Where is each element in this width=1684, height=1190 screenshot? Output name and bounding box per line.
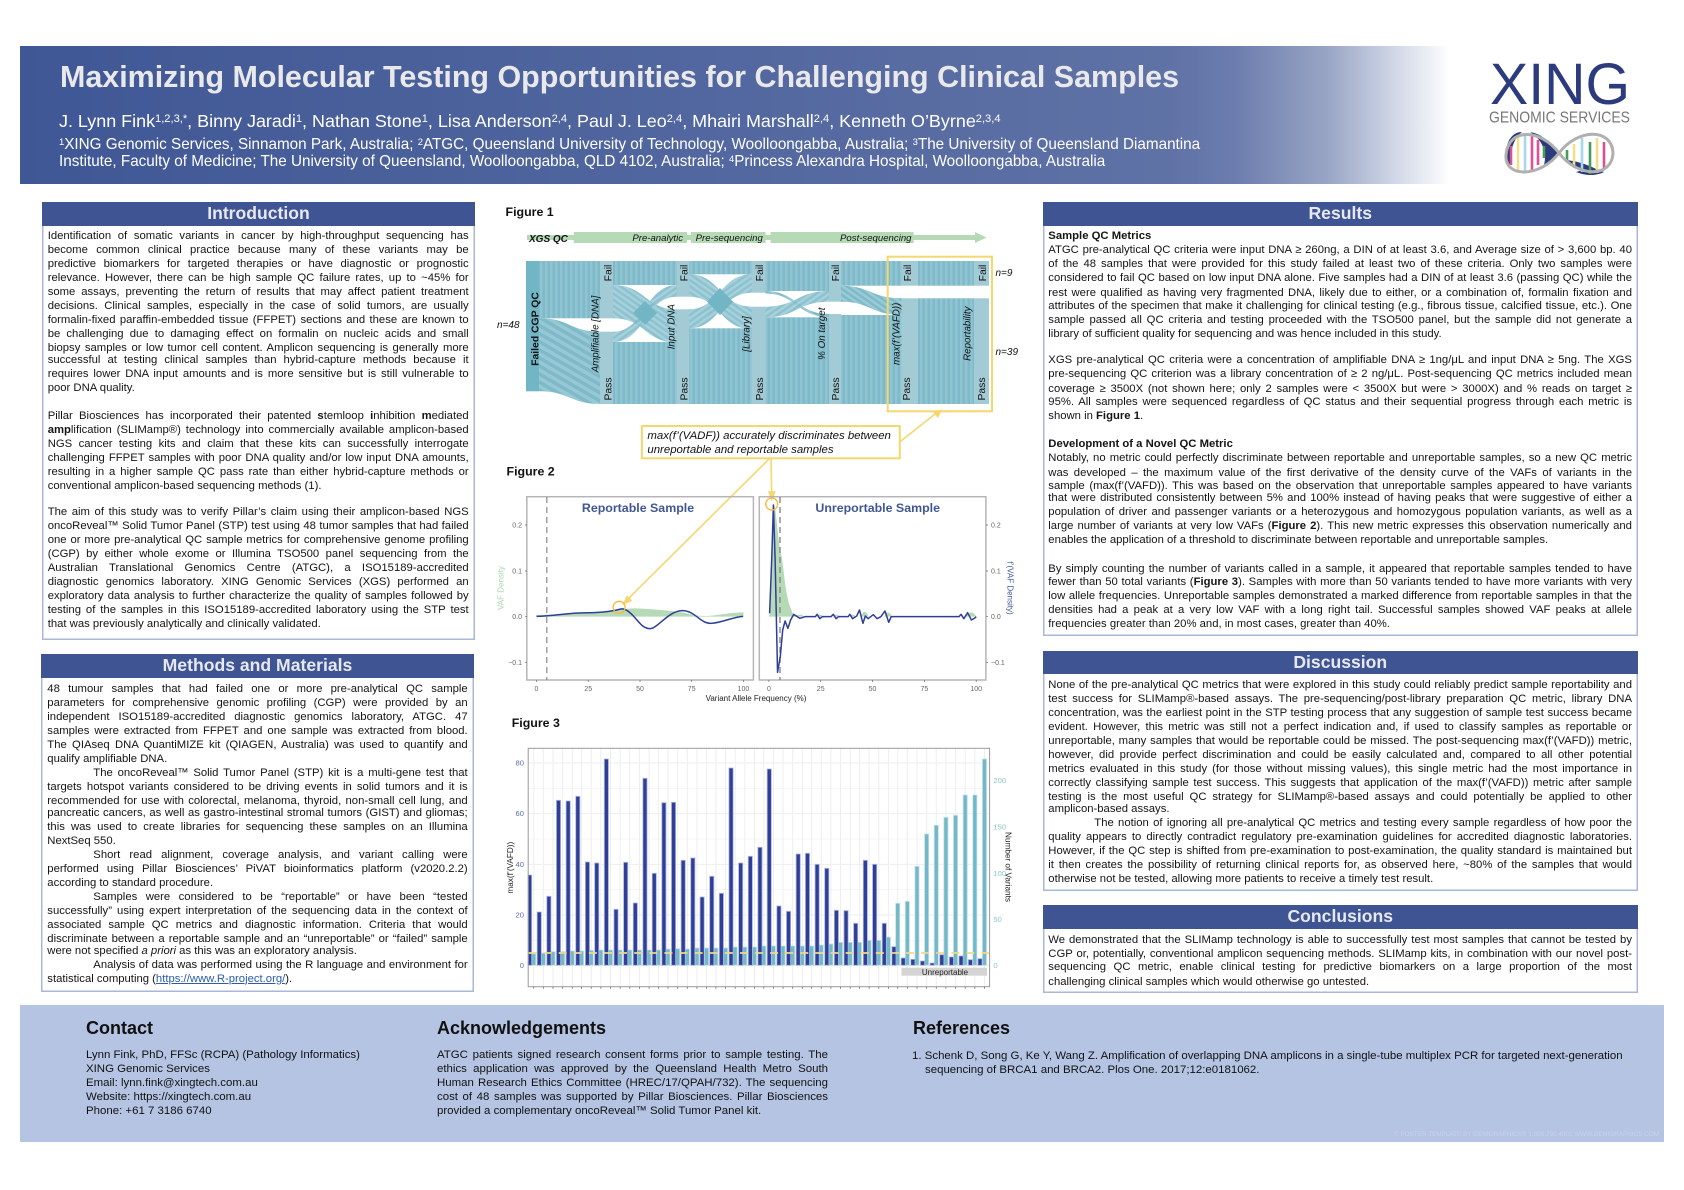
blue bars: max(f'(VAFD)) <box>528 759 982 965</box>
text: contact details <box>86 1048 360 1117</box>
text: discussion body: The notion of ignoring all pre-analytical QC metrics and testing every sample regardless of how poor the <box>1094 817 1632 829</box>
text: discussion body: None of the pre-analytical QC metrics that were explored in this study could reliably predict sample reportability and <box>1048 679 1632 691</box>
text: results body: enables the application of a threshold to discriminate between reportable and unreportable samples. <box>1048 534 1548 546</box>
text: methods body: statistical computing (https://www.R-project.org/). <box>47 973 292 985</box>
text: methods body: Samples were considered to be “reportable” or have been “tested <box>93 891 468 903</box>
logo: XING Genomic Services <box>1489 52 1630 175</box>
sankey node and metric labels: Input DNA <box>666 304 677 349</box>
text: discussion body: however, did provide perfect discrimination and could be easily calculated and, compared to all other potential <box>1048 749 1632 761</box>
sankey node and metric labels: Pass <box>680 377 690 401</box>
sankey node and metric labels: Failed CGP QC <box>530 292 541 366</box>
left axis labels: 0 <box>520 961 524 970</box>
axes and tick labels <box>508 522 1005 693</box>
heading: discussion: Discussion <box>1293 652 1387 672</box>
text: introduction body: Identification of somatic variants in cancer by high-throughput sequencing has <box>48 230 469 242</box>
axes and tick labels: 0.2 <box>512 522 522 530</box>
axis titles: Variant Allele Frequency (%) <box>706 694 807 703</box>
text: methods body: recommended for use with colorectal, melanoma, thyroid, non-small cell lung, and <box>47 795 468 807</box>
text: references list: 1. Schenk D, Song G, Ke Y, Wang Z. Amplification of overlapping DNA amplicons in a single-tube multiplex PCR for targeted next-generation <box>912 1050 1623 1062</box>
text: results body: sample (max(f’(VAFD)). This was based on the observation that unreportable samples appeared to have variants <box>1048 480 1632 492</box>
left axis labels <box>516 758 524 970</box>
logo: XING Genomic Services: XING <box>1490 52 1630 117</box>
text: introduction body: diagnostic genomics laboratory. XING Genomic Services (XGS) performed an <box>48 576 469 588</box>
text: results body: considered to fail QC based on low input DNA alone. Five samples had a DIN of at least 3.6 (passing QC) while the <box>1048 272 1632 284</box>
text: methods body: targets hotspot variants considered to be driving events in solid tumors and it is <box>47 781 468 793</box>
axes and tick labels: 25 <box>817 686 825 693</box>
right axis labels: 100 <box>993 869 1006 878</box>
text: introduction body: requires lower DNA input amounts and is more sensitive but is still vulnerable to <box>48 368 469 380</box>
text: discussion body: it then creates the possibility of returning clinical reports for, as observed here, ~80% of the samples that would <box>1048 859 1632 871</box>
text: conclusions body <box>1048 934 1632 988</box>
heading: results: Results <box>1308 203 1372 223</box>
text: results body: coverage ≥ 3500X (not shown here; only 2 samples were < 3500X but were > 3000X) and % reads on target ≥ <box>1048 383 1632 395</box>
axis titles: VAF Density <box>496 566 506 610</box>
chart: reportable sample <box>527 497 753 680</box>
axes and tick labels: 100 <box>738 686 749 693</box>
sankey node and metric labels: max(f’(VAFD)) <box>892 303 902 365</box>
chart frame <box>528 748 990 987</box>
text: references list <box>912 1050 1623 1076</box>
chart: unreportable sample <box>759 497 986 680</box>
figure 3 label: Figure 3 <box>512 716 560 730</box>
text: introduction body <box>48 230 469 630</box>
text: introduction body: one or more pre-analytical QC sample metrics for comprehensive genome profiling <box>48 534 469 546</box>
text: results body: 95%. All samples were sequenced regardless of QC status and their sequential progress through each metric is <box>1048 396 1632 408</box>
right axis labels: 150 <box>993 822 1006 832</box>
heading: results <box>1043 202 1638 226</box>
text: results body: large number of variants at very low VAFs (Figure 2). This new metric expresses this observation numerically and <box>1048 520 1632 532</box>
text: methods body: The oncoReveal™ Solid Tumor Panel (STP) kit is a multi-gene test that <box>93 767 468 779</box>
threshold dashed line <box>528 952 989 954</box>
text: introduction body: conventional amplicon-based sequencing methods (1). <box>48 480 322 492</box>
text: results body: rest were qualified as having very fragmented DNA, likely due to either, or a combination of, formalin fixation and <box>1048 287 1632 299</box>
text: conclusions body: challenging clinical samples which would otherwise go untested. <box>1048 976 1369 988</box>
text: discussion body: correctly classifying sample test success. This suggests that application of the max(f’(VAFD)) metric after sample <box>1048 777 1632 789</box>
text: methods body: this was used to create libraries for sequencing these samples on an Illumina <box>47 821 468 833</box>
heading: introduction <box>42 202 475 226</box>
heading: methods and materials <box>41 654 474 678</box>
text: results body: By simply counting the number of variants called in a sample, it appeared that reportable samples tended to have <box>1048 563 1632 575</box>
footer panel: contact, acknowledgements, references <box>20 1005 1664 1142</box>
right axis labels: 200 <box>993 776 1006 785</box>
text: discussion body: test success for SLIMamp®-based assays. The pre-sequencing/post-library preparation QC metric, library DNA <box>1048 693 1632 705</box>
text: results body: frequencies greater than 20% and, in most cases, greater than 40%. <box>1048 618 1390 630</box>
text: acknowledgements body <box>437 1048 828 1117</box>
text: methods body: The QIAseq DNA QuantiMIZE kit (QIAGEN, Australia) was used to quantify and <box>47 739 468 751</box>
text: methods body: performed using Pillar Biosciences’ PiVAT bioinformatics platform (v2020.2.2) <box>47 863 468 875</box>
heading: conclusions <box>1043 905 1638 929</box>
axis titles: max(f’(VAFD)) <box>506 842 515 894</box>
text: contact details: Website: https://xingtech.com.au <box>86 1091 251 1103</box>
sankey node and metric labels: Pass <box>902 377 913 401</box>
text: introduction body: predictive biomarkers for targeted therapies or have diagnostic or prognostic <box>48 258 469 270</box>
text: acknowledgements body: provided a complementary oncoReveal™ Solid Tumor Panel kit. <box>437 1105 761 1117</box>
text: introduction body: Pillar Biosciences has incorporated their patented stemloop inhibition mediated <box>48 410 469 422</box>
sankey node and metric labels: Pass <box>604 377 614 401</box>
callout connectors <box>624 410 941 604</box>
heading: references: References <box>913 1018 1010 1038</box>
axis titles: Number of Variants <box>1004 832 1012 902</box>
figure 1: QC stage arrow <box>527 232 987 245</box>
sankey node and metric labels: Fail <box>604 265 614 281</box>
text: results body: XGS pre-analytical QC criteria were a concentration of amplifiable DNA ≥ 1ng/μL and input DNA ≥ 5ng. The XGS <box>1048 354 1632 366</box>
sankey node and metric labels: Pass <box>977 377 988 401</box>
text: introduction body: that was previously analytically and clinically validated. <box>48 618 321 630</box>
axes and tick labels: 0 <box>767 686 771 693</box>
sankey node and metric labels: Fail <box>680 265 690 281</box>
text: methods body: discriminate between a reportable sample and an “unreportable” or “failed” sample <box>47 933 468 945</box>
axes and tick labels: 100 <box>970 686 982 693</box>
chart: reportable sample: Reportable Sample <box>582 501 694 515</box>
panel: discussion <box>1043 651 1638 891</box>
affiliations: Institute, Faculty of Medicine; The University of Queensland, Woolloongabba, QLD 4102, Australia; 4Princess Alexandra Hospital, Woolloongabba, Australia <box>59 153 1105 170</box>
text: discussion body: quality appears to directly contradict regulatory pre-examination guidelines for accredited diagnostic laboratories. <box>1048 831 1632 843</box>
sankey node and metric labels: n=9 <box>996 268 1013 279</box>
text: methods body: associated sample QC metrics and diagnostic information. Criteria that would <box>47 919 468 931</box>
text: introduction body: The aim of this study was to verify Pillar’s claim using their amplicon-based NGS <box>48 506 469 518</box>
axes and tick labels: 0.0 <box>512 614 522 621</box>
chart: unreportable sample: Unreportable Sample <box>815 501 940 515</box>
text: discussion body: However, if the QC step is shifted from pre-examination to post-examination, the quality standard is maintained but <box>1048 845 1632 857</box>
authors: J. Lynn Fink1,2,3,*, Binny Jaradi1, Nathan Stone1, Lisa Anderson2,4, Paul J. Leo2,4, Mhairi Marshall2,4, Kenneth O’Byrne2,3,4 <box>59 111 1001 131</box>
text: contact details: Email: lynn.fink@xingtech.com.au <box>86 1077 258 1089</box>
text: conclusions body: sequencing QC metric, enable clinical testing for predictive biomarkers on a large proportion of the most <box>1048 961 1632 973</box>
text: introduction body: resulting in a higher sample QC pass rate than either hybrid-capture methods or <box>48 466 469 478</box>
text: methods body: qualify amplifiable DNA. <box>47 753 167 765</box>
left axis labels: 80 <box>516 758 524 768</box>
text: references list: sequencing of BRCA1 and BRCA2. Plos One. 2017;12:e0181062. <box>925 1064 1259 1076</box>
axis titles <box>506 832 1012 902</box>
sankey node and metric labels: Reportability <box>962 305 974 361</box>
left axis labels: 40 <box>516 860 524 869</box>
text: introduction body: be challenging due to damaging effect on formalin on nucleic acids and small <box>48 328 469 340</box>
text: introduction body: oncoReveal™ Solid Tumor Panel (STP) test using 48 tumor samples that had failed <box>48 520 469 532</box>
unreportable strip: Unreportable <box>922 968 969 977</box>
text: results body: pre-sequencing QC criterion was a library concentration of ≥ 2 ng/μL. Post-sequencing QC metrics included mean <box>1048 368 1632 380</box>
right axis labels <box>993 776 1006 970</box>
text: introduction body: challenging FFPET samples with poor DNA quality and/or low input DNA amounts, <box>48 452 469 464</box>
text: results body: was developed – the maximum value of the first derivative of the density curve of the VAFs of variants in the <box>1048 467 1632 479</box>
text: introduction body: poor DNA quality. <box>48 382 135 394</box>
ticks <box>534 987 984 989</box>
panel: introduction <box>42 202 475 640</box>
logo: XING Genomic Services: GENOMIC SERVICES <box>1489 110 1630 126</box>
text: discussion body: concentration, was the earliest point in the STP testing process that any suggestion of sample test success became <box>1048 707 1632 719</box>
title: Maximizing Molecular Testing Opportunities for Challenging Clinical Samples <box>60 60 1179 94</box>
callout: unreportable and reportable samples <box>647 444 834 456</box>
text: discussion body <box>1048 679 1632 885</box>
watermark: © POSTER TEMPLATE BY GENIGRAPHICS® 1.800.790.4001 WWW.GENIGRAPHICS.COM <box>1394 1131 1659 1138</box>
unreportable strip <box>902 968 987 977</box>
axes and tick labels: 50 <box>636 686 644 693</box>
text: methods body: successfully” using expert interpretation of the sequencing data in the context of <box>47 905 468 917</box>
axis titles: f’(VAF Density) <box>1006 561 1014 615</box>
header banner <box>20 46 1664 184</box>
text: introduction body: amplification (SLIMamp®) technology into commercially available amplicon-based <box>48 424 469 436</box>
text: methods body: pancreatic cancers, as well as gastro-intestinal stromal tumors (GIST) and gliomas; <box>47 807 468 819</box>
sankey nodes <box>526 261 989 404</box>
text: results body: attributes of the specimen that make it challenging for clinical testing (e.g., fibrous tissue, calcified tissue, etc.). One <box>1048 300 1632 312</box>
text: conclusions body: CGP or, potentially, conventional amplicon sequencing methods. SLIMamp kits, in combination with our novel post- <box>1048 948 1632 960</box>
sankey node and metric labels: Pass <box>755 377 766 401</box>
text: results body: sample passed all QC criteria and testing proceeded with the TSO500 panel, but the sample did not generate a <box>1048 314 1632 326</box>
text: results body: library of sufficient quality for sequencing and was hence included in this study. <box>1048 328 1442 340</box>
axes and tick labels: 50 <box>869 686 876 693</box>
text: acknowledgements body: cost of 48 samples was supported by Pillar Biosciences. Pillar Biosciences <box>437 1091 828 1103</box>
text: results body: Notably, no metric could perfectly discriminate between reportable and unreportable samples, so a new QC metric <box>1048 452 1632 464</box>
sankey node and metric labels: n=39 <box>996 347 1018 358</box>
sankey node and metric labels: Amplifiable [DNA] <box>590 295 602 373</box>
text: introduction body: decisions. Clinical samples, especially in the case of solid tumors, are usually <box>48 300 469 312</box>
axis titles <box>496 561 1014 703</box>
heading: conclusions: Conclusions <box>1287 906 1393 926</box>
right axis labels: 0 <box>993 961 998 970</box>
sankey node and metric labels: Fail <box>831 265 842 281</box>
text: results body: ATGC pre-analytical QC criteria were input DNA ≥ 260ng, a DIN of at least 3.6, and Average size of > 3,600 bp. 40 <box>1048 244 1632 256</box>
axes and tick labels: 0 <box>535 686 539 693</box>
axes and tick labels: 75 <box>921 686 928 693</box>
text: introduction body: exploratory data analysis to further characterize the quality of samples followed by <box>48 590 469 602</box>
panel: methods and materials <box>41 654 474 992</box>
text: acknowledgements body: ATGC patients signed research consent forms prior to sample testing. The <box>437 1048 828 1060</box>
axes and tick labels: 25 <box>584 686 592 693</box>
teal bars: number of variants <box>532 759 987 965</box>
text: introduction body: NGS cancer testing kits and claim that these kits can successfully interrogate <box>48 438 469 450</box>
icon: DNA infinity <box>1506 132 1613 175</box>
text: methods body: independent ISO15189-accredited diagnostic genomics laboratory, ATGC. 47 <box>47 711 468 723</box>
axes and tick labels: −0.1 <box>991 660 1005 667</box>
text: results body: of the 48 samples that were provided for this study failed at least two of these criteria. Only two samples were <box>1048 258 1632 270</box>
grid <box>528 788 990 940</box>
text: discussion body: otherwise not be tested, allowing more patients to receive a timely test result. <box>1048 873 1433 885</box>
heading: contact: Contact <box>86 1018 153 1038</box>
text: results body: Sample QC Metrics <box>1048 230 1151 242</box>
figure 1: QC stage arrow: XGS QC <box>528 234 569 245</box>
text: results body <box>1048 230 1632 630</box>
right axis labels: 50 <box>993 915 1002 924</box>
axes and tick labels: 75 <box>688 686 696 693</box>
sankey node and metric labels: Fail <box>978 265 989 281</box>
text: results body: fewer than 50 total variants (Figure 3). Samples with more than 50 variants tended to have more variants with very <box>1048 576 1632 588</box>
text: results body: densities had a peak at a very low VAF with a long right tail. Successful samples showed VAF peaks at allele <box>1048 604 1632 616</box>
left axis labels: 20 <box>516 910 524 920</box>
figure 1: QC stage arrow: Pre-analytic <box>632 233 683 244</box>
text: discussion body: amplicon-based assays. <box>1048 803 1170 815</box>
figure 1: QC stage arrow: Pre-sequencing <box>696 233 763 244</box>
sankey node and metric labels: Fail <box>755 265 766 281</box>
callout <box>642 426 900 458</box>
axes and tick labels: 0.2 <box>991 522 1001 530</box>
text: discussion body: unreportable, many samples that would be reportable could be missed. The post-sequencing max(f’(VAFD)) metric, <box>1048 735 1632 747</box>
text: methods body: were not specified a priori as this was an exploratory analysis. <box>47 945 357 957</box>
text: methods body: samples were extracted from FFPET and one sample was extracted from blood. <box>47 725 468 737</box>
sankey node and metric labels: [Library] <box>742 316 752 353</box>
text: contact details: XING Genomic Services <box>86 1063 210 1075</box>
sankey node and metric labels: Fail <box>903 265 914 281</box>
text: methods body: Analysis of data was performed using the R language and environment for <box>93 959 468 971</box>
figure 2 label: Figure 2 <box>506 464 555 478</box>
text: acknowledgements body: Human Research Ethics Committee (HREC/17/QPAH/732). The sequencing <box>437 1077 828 1089</box>
sankey node and metric labels: n=48 <box>497 320 520 331</box>
heading: introduction: Introduction <box>207 203 310 223</box>
figure 1: sankey diagram <box>497 257 1018 411</box>
text: results body: population of driver and passenger variants or a heterozygous and homozygous population variants, as well as a <box>1048 506 1632 518</box>
text: results body: that were distributed consistently between 5% and 100% instead of having peaks that were suggestive of either a <box>1048 492 1632 504</box>
highlight box <box>888 257 992 411</box>
heading: acknowledgements: Acknowledgements <box>437 1018 606 1038</box>
sankey node and metric labels <box>497 265 1018 401</box>
panel: conclusions <box>1043 905 1638 993</box>
text: introduction body: successful at testing clinical samples than hybrid-capture methods because it <box>48 354 469 366</box>
text: introduction body: formalin-fixed paraffin-embedded tissue (FFPET) sections and these are known to <box>48 314 469 326</box>
figure 3: bar chart <box>506 748 1012 989</box>
text: methods body: according to standard procedure. <box>47 877 213 889</box>
sankey node and metric labels: Pass <box>831 377 842 401</box>
heading: discussion <box>1043 651 1638 674</box>
text: acknowledgements body: ethics application was approved by the Queensland Health Metro South <box>437 1063 828 1075</box>
text: methods body: 48 tumour samples that had failed one or more pre-analytical QC sample <box>47 683 468 695</box>
text: introduction body: some assays, preventing the return of results that may affect patient treatment <box>48 286 469 298</box>
sankey flows <box>539 261 974 404</box>
callout: max(f’(VADF)) accurately discriminates between <box>647 430 891 442</box>
figure 1 label: Figure 1 <box>506 205 554 219</box>
text: introduction body: (CGP) by either whole exome or Illumina TSO500 panel sequencing from the <box>48 548 469 560</box>
text: introduction body: biopsy samples or low tumor cell content. Amplicon sequencing is generally more <box>48 342 469 354</box>
text: contact details: Lynn Fink, PhD, FFSc (RCPA) (Pathology Informatics) <box>86 1048 360 1060</box>
panel: results <box>1043 202 1638 636</box>
left axis labels: 60 <box>516 809 524 818</box>
text: results body: low allele frequencies. Unreportable samples demonstrated a marked difference from reportable samples in that the <box>1048 590 1632 602</box>
affiliations: 1XING Genomic Services, Sinnamon Park, Australia; 2ATGC, Queensland University of Technology, Woolloongabba, Australia; 3The University of Queensland Diamantina <box>59 136 1200 153</box>
text: results body: shown in Figure 1. <box>1048 410 1143 422</box>
text: introduction body: testing of the samples in this ISO15189-accredited laboratory using the STP test <box>48 604 469 616</box>
axes and tick labels: −0.1 <box>508 660 522 667</box>
text: introduction body: relevance. However, there can be high sample QC failure rates, up to ~45% for <box>48 272 469 284</box>
text: discussion body: testing is the most useful QC strategy for SLIMamp®-based assays and could potentially be applied to other <box>1048 791 1632 803</box>
text: methods body: NextSeq 550. <box>47 835 116 847</box>
text: methods body: Short read alignment, coverage analysis, and variant calling were <box>93 849 468 861</box>
sankey node and metric labels: % On target <box>817 306 828 360</box>
text: introduction body: become common clinical practice because many of these variants may be <box>48 244 469 256</box>
affiliations <box>59 136 1200 170</box>
text: discussion body: metrics evaluated in this study (for those without missing values), this single metric had the most importance in <box>1048 763 1632 775</box>
figure 1: QC stage arrow: Post-sequencing <box>840 233 912 244</box>
text: contact details: Phone: +61 7 3186 6740 <box>86 1105 212 1117</box>
text: methods body <box>47 683 468 985</box>
figure 2: density charts <box>496 497 1014 703</box>
heading: methods and materials: Methods and Materials <box>163 655 352 675</box>
axes and tick labels: 0.1 <box>991 568 1001 576</box>
text: conclusions body: We demonstrated that the SLIMamp technology is able to successfully test most samples that cannot be tested by <box>1048 934 1632 946</box>
text: results body: Development of a Novel QC Metric <box>1048 438 1233 450</box>
text: introduction body: Australian Translational Genomics Centre (ATGC), a ISO15189-accredited <box>48 562 469 574</box>
axes and tick labels: 0.1 <box>512 568 522 576</box>
axes and tick labels: 0.0 <box>991 614 1001 621</box>
text: discussion body: evident. However, this metric was still not a perfect indication and, if used to classify samples as reportable or <box>1048 721 1632 733</box>
text: methods body: parameters for comprehensive genomic profiling (CGP) were provided by an <box>47 697 468 709</box>
